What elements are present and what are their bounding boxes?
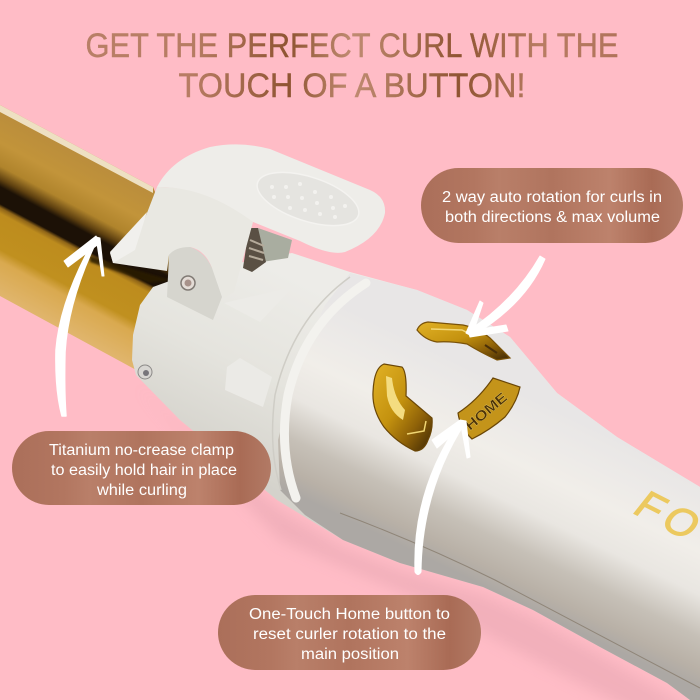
callout: home button: main position — [301, 646, 399, 663]
callout: home button: reset curler rotation to the — [253, 626, 446, 643]
clamp front face — [110, 187, 253, 298]
button: L rotation — [373, 364, 432, 451]
button: R rotation — [417, 322, 510, 360]
callout: auto rotation: 2 way auto rotation for curls in — [442, 189, 662, 206]
pivot bracket — [167, 247, 222, 320]
callout: clamp: to easily hold hair in place — [51, 462, 237, 479]
lever top — [157, 144, 385, 253]
screw — [138, 365, 152, 379]
callout: clamp — [12, 431, 271, 505]
callout: auto rotation — [421, 168, 683, 243]
grip dots pad — [251, 162, 365, 236]
title: GET THE PERFECT CURL WITH THE — [86, 27, 618, 65]
callout: home button — [218, 595, 481, 670]
arrow: rotation button — [466, 256, 545, 337]
flat plate — [224, 287, 293, 322]
gold barrel — [0, 105, 175, 372]
title: TOUCH OF A BUTTON! — [178, 67, 526, 105]
callout: clamp: while curling — [96, 482, 187, 499]
clamp spring — [243, 228, 292, 272]
arrow: clamp — [56, 236, 104, 416]
collar ridge — [284, 283, 366, 498]
drop shadow — [136, 385, 690, 700]
side tab — [225, 358, 272, 407]
callout: clamp: Titanium no-crease clamp — [49, 442, 234, 459]
seam line — [340, 513, 700, 688]
handle main section — [278, 273, 700, 700]
title — [86, 27, 618, 105]
clamp tip — [110, 212, 147, 263]
button: home — [458, 378, 520, 439]
button: home: HOME — [462, 389, 510, 433]
clamp lever — [110, 144, 385, 298]
callout: home button: One-Touch Home button to — [249, 606, 450, 623]
arrow: home button — [415, 420, 470, 574]
handle body — [132, 253, 700, 700]
callout: auto rotation: both directions & max volume — [445, 209, 660, 226]
